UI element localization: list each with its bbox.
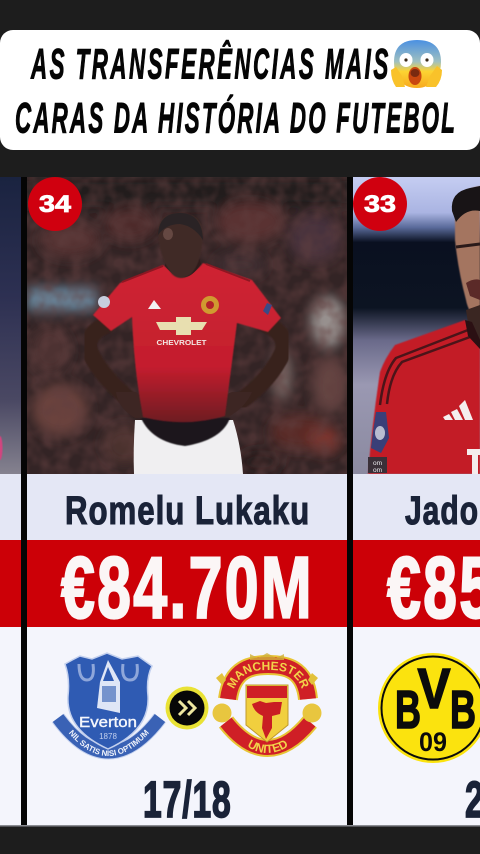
icon: screaming face emoji xyxy=(391,40,442,88)
shirt xyxy=(368,320,480,474)
badge: rank 33: 33 xyxy=(364,191,396,218)
icon: Everton crest: Everton xyxy=(79,714,137,731)
black undershirt xyxy=(141,418,230,446)
photo: Sancho in red shirt: om xyxy=(373,467,382,474)
panel: card 33 Jadon Sancho xyxy=(353,177,480,829)
name band xyxy=(353,474,480,540)
photo: Lukaku in red shirt xyxy=(27,177,348,474)
icon: Everton crest: 1878 xyxy=(99,732,117,741)
club panel xyxy=(353,627,480,829)
card dividers xyxy=(21,177,27,825)
icon: Borussia Dortmund crest: 09 xyxy=(419,727,447,757)
shirt logo xyxy=(443,400,473,420)
icon: Borussia Dortmund crest xyxy=(378,653,480,763)
badge: rank 33 xyxy=(353,177,407,231)
neck and head xyxy=(165,260,201,278)
name band: Romelu Lukaku xyxy=(65,488,309,533)
icon: Manchester United crest: UNITED xyxy=(248,740,287,753)
price band xyxy=(353,540,480,627)
sleeve badge xyxy=(371,412,389,453)
photo: Lukaku in red shirt: CHEVROLET xyxy=(156,340,207,347)
price band: €84.70M xyxy=(61,539,312,636)
title panel xyxy=(0,30,480,150)
title line 2: CARAS DA HISTÓRIA DO FUTEBOL xyxy=(15,92,455,143)
icon: Everton crest xyxy=(52,652,166,760)
shirt details xyxy=(156,317,207,335)
icon: Manchester United crest: MANCHESTER xyxy=(226,662,308,689)
icon: transfer arrow xyxy=(166,686,208,730)
icon: Manchester United crest xyxy=(212,653,322,757)
icon: Borussia Dortmund crest: V xyxy=(418,657,450,721)
shorts xyxy=(134,420,243,474)
panel: card 34 Romelu Lukaku xyxy=(27,177,347,829)
shirt xyxy=(93,263,281,422)
arms xyxy=(89,325,130,400)
bottom edge line xyxy=(0,825,480,826)
title line 1: AS TRANSFERÊNCIAS MAIS xyxy=(30,38,388,89)
club panel xyxy=(27,627,347,829)
badge: rank 34: 34 xyxy=(39,191,72,218)
badge: rank 34 xyxy=(28,177,82,231)
icon: Borussia Dortmund crest: B xyxy=(395,680,421,740)
icon: Everton crest: NIL SATIS NISI OPTIMUM xyxy=(68,730,149,756)
name band xyxy=(27,474,347,540)
photo: Sancho in red shirt xyxy=(353,177,480,474)
left neighbouring card (partial) xyxy=(0,177,21,825)
crowd texture xyxy=(27,177,347,474)
photo: Sancho in red shirt: om xyxy=(373,460,382,467)
hands xyxy=(125,392,142,418)
head xyxy=(455,186,480,325)
season 17/18: 17/18 xyxy=(143,772,231,829)
